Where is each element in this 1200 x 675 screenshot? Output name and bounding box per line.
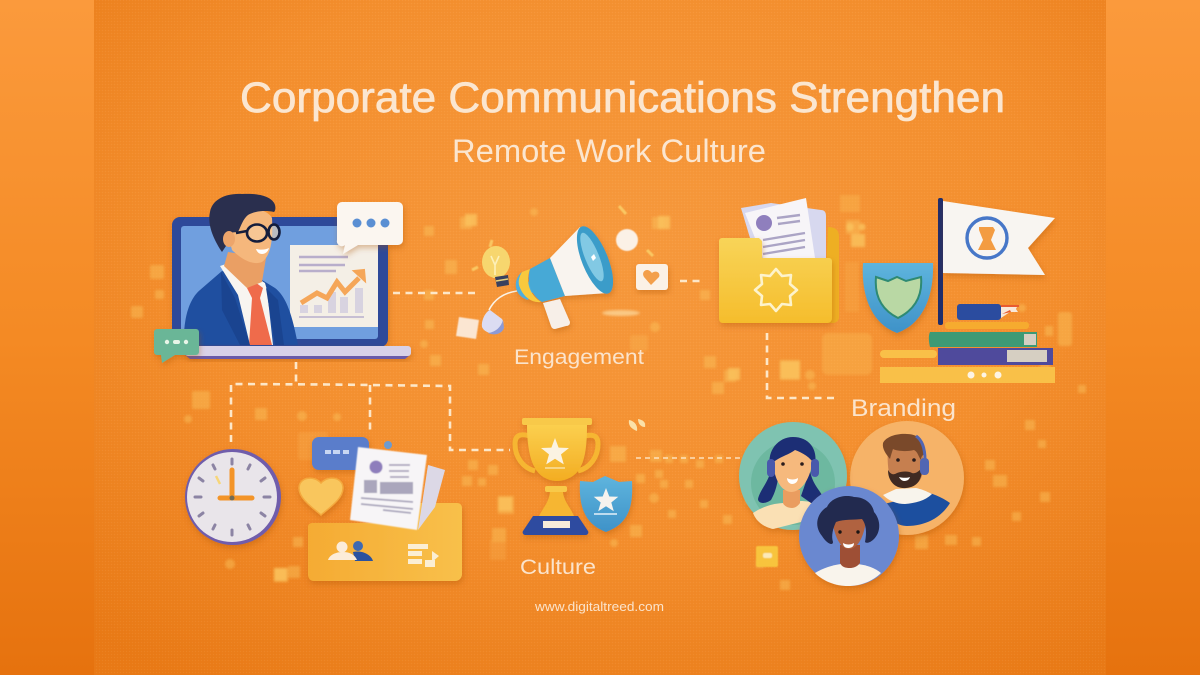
label: Engagement: Engagement [514,345,644,369]
small leaf motif [629,419,645,431]
avatar: woman with curly hair [799,486,899,586]
green chat bubble [154,329,199,363]
people glyph [328,541,373,561]
illustration: clock [185,449,281,545]
subtitle: Remote Work Culture [452,133,766,169]
white circle [616,229,638,251]
folder emblem [755,269,797,311]
heart card [636,264,668,290]
small yellow tile [756,546,778,567]
blue shield [580,476,632,532]
presenter hair [209,194,275,252]
shield [863,263,933,333]
illustration: trophy [515,418,645,579]
trophy star [541,438,569,464]
illustration: documents card group [299,437,462,581]
presenter shirt [220,262,273,345]
presenter face [228,208,272,263]
glasses [236,224,280,242]
back paper [418,465,445,530]
blue chat pill [312,437,369,470]
folder back [824,227,839,323]
small blue accent [384,441,392,449]
illustration: megaphone group [456,206,668,369]
folder front [719,238,832,323]
list glyph [408,544,439,567]
presenter neck [224,252,266,288]
megaphone [516,222,621,329]
decorative confetti squares and dots [131,195,1086,590]
yellow sparks [472,206,653,270]
cable and plug [482,291,517,334]
front paper [745,198,815,258]
presenter suit [184,271,298,345]
white box [456,317,479,339]
chart document [290,245,378,327]
label: Branding: Branding [851,395,956,422]
label: Culture: Culture [520,556,596,579]
illustration: remote team avatars [739,421,964,586]
flag [938,198,1055,325]
presenter lapels [221,272,284,345]
laptop base [185,346,411,359]
laptop screen [172,217,388,347]
heart [299,478,343,515]
books stack [880,304,1055,383]
avatar: woman with headset [739,422,847,530]
dashed connector lines [231,281,838,458]
website footer: www.digitaltreed.com [534,599,664,614]
title: Corporate Communications Strengthen [240,74,1005,122]
blurred smear [602,310,640,316]
icon: light bulb [482,246,510,287]
illustration: presenter on laptop [154,194,411,363]
yellow card [308,503,462,581]
avatar: bearded man [850,421,964,535]
back paper [741,203,826,258]
white speech bubble [337,202,403,254]
illustration: folder group [719,198,1055,422]
presenter tie [247,282,272,345]
front paper [350,447,427,530]
